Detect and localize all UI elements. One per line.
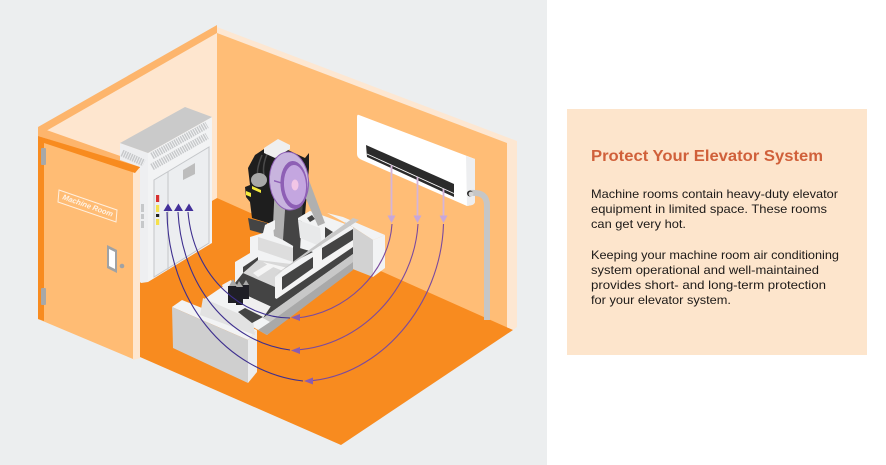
paragraph: maintenance: for your elevator system. [591,293,731,307]
floor [140,198,513,445]
left belt [273,183,285,240]
small motor [251,173,267,187]
paragraph: heat: can get very hot. [591,217,686,231]
panel: gray illustration background [0,0,547,465]
pipe [470,193,487,320]
small contactors [222,279,249,305]
cabinet vents [122,125,207,167]
paragraph: maintenance: system operational and well-maintained [591,263,819,277]
paragraph: heat [591,187,838,231]
rails [263,254,353,322]
side wall [38,25,217,250]
right belt [303,175,325,226]
dark panels [282,257,313,290]
paragraph: heat: equipment in limited space. These rooms [591,202,827,216]
motor [245,139,309,235]
door window [107,245,117,273]
paragraph: maintenance: Keeping your machine room air conditioning [591,248,839,262]
frame near belt [265,220,283,244]
motor body [245,147,309,225]
paragraph: heat: Machine rooms contain heavy-duty elevator [591,187,838,201]
air conditioner [357,115,487,320]
diagonal bar [275,218,359,275]
airflow arrowheads into cabinet [164,204,194,211]
airflow: cool air arrows from AC [388,165,448,223]
lower platform [200,298,255,335]
dark strip [263,247,353,318]
motor foot [248,218,267,235]
left mid block [243,257,258,273]
machine base [200,175,359,335]
drive column [283,200,303,250]
upper block [258,237,293,262]
vent [366,145,454,197]
machine room illustration [38,25,517,445]
airflow: curved air paths [167,212,444,381]
front block [172,300,257,383]
dark platform [235,273,282,308]
panel: text card [567,109,867,355]
base silhouette [203,211,353,335]
cabinet doors [154,147,209,277]
door sign: Machine Room [61,192,115,219]
airflow arrowheads at floor [291,314,313,384]
back block [327,213,385,277]
paragraph: maintenance: provides short- and long-term protection [591,278,826,292]
motor top cap [264,139,290,158]
back wall [217,27,517,330]
white frame strip [275,240,353,298]
cabinet plate [183,163,195,180]
door hinges [41,148,46,305]
indicator lights [156,195,159,225]
heading: Protect Your Elevator System [591,148,823,165]
electrical cabinet [120,107,212,283]
centre recess [243,260,291,288]
paragraph: maintenance [591,248,839,307]
sheave [268,151,310,211]
door knob [120,264,124,268]
door [38,127,140,360]
